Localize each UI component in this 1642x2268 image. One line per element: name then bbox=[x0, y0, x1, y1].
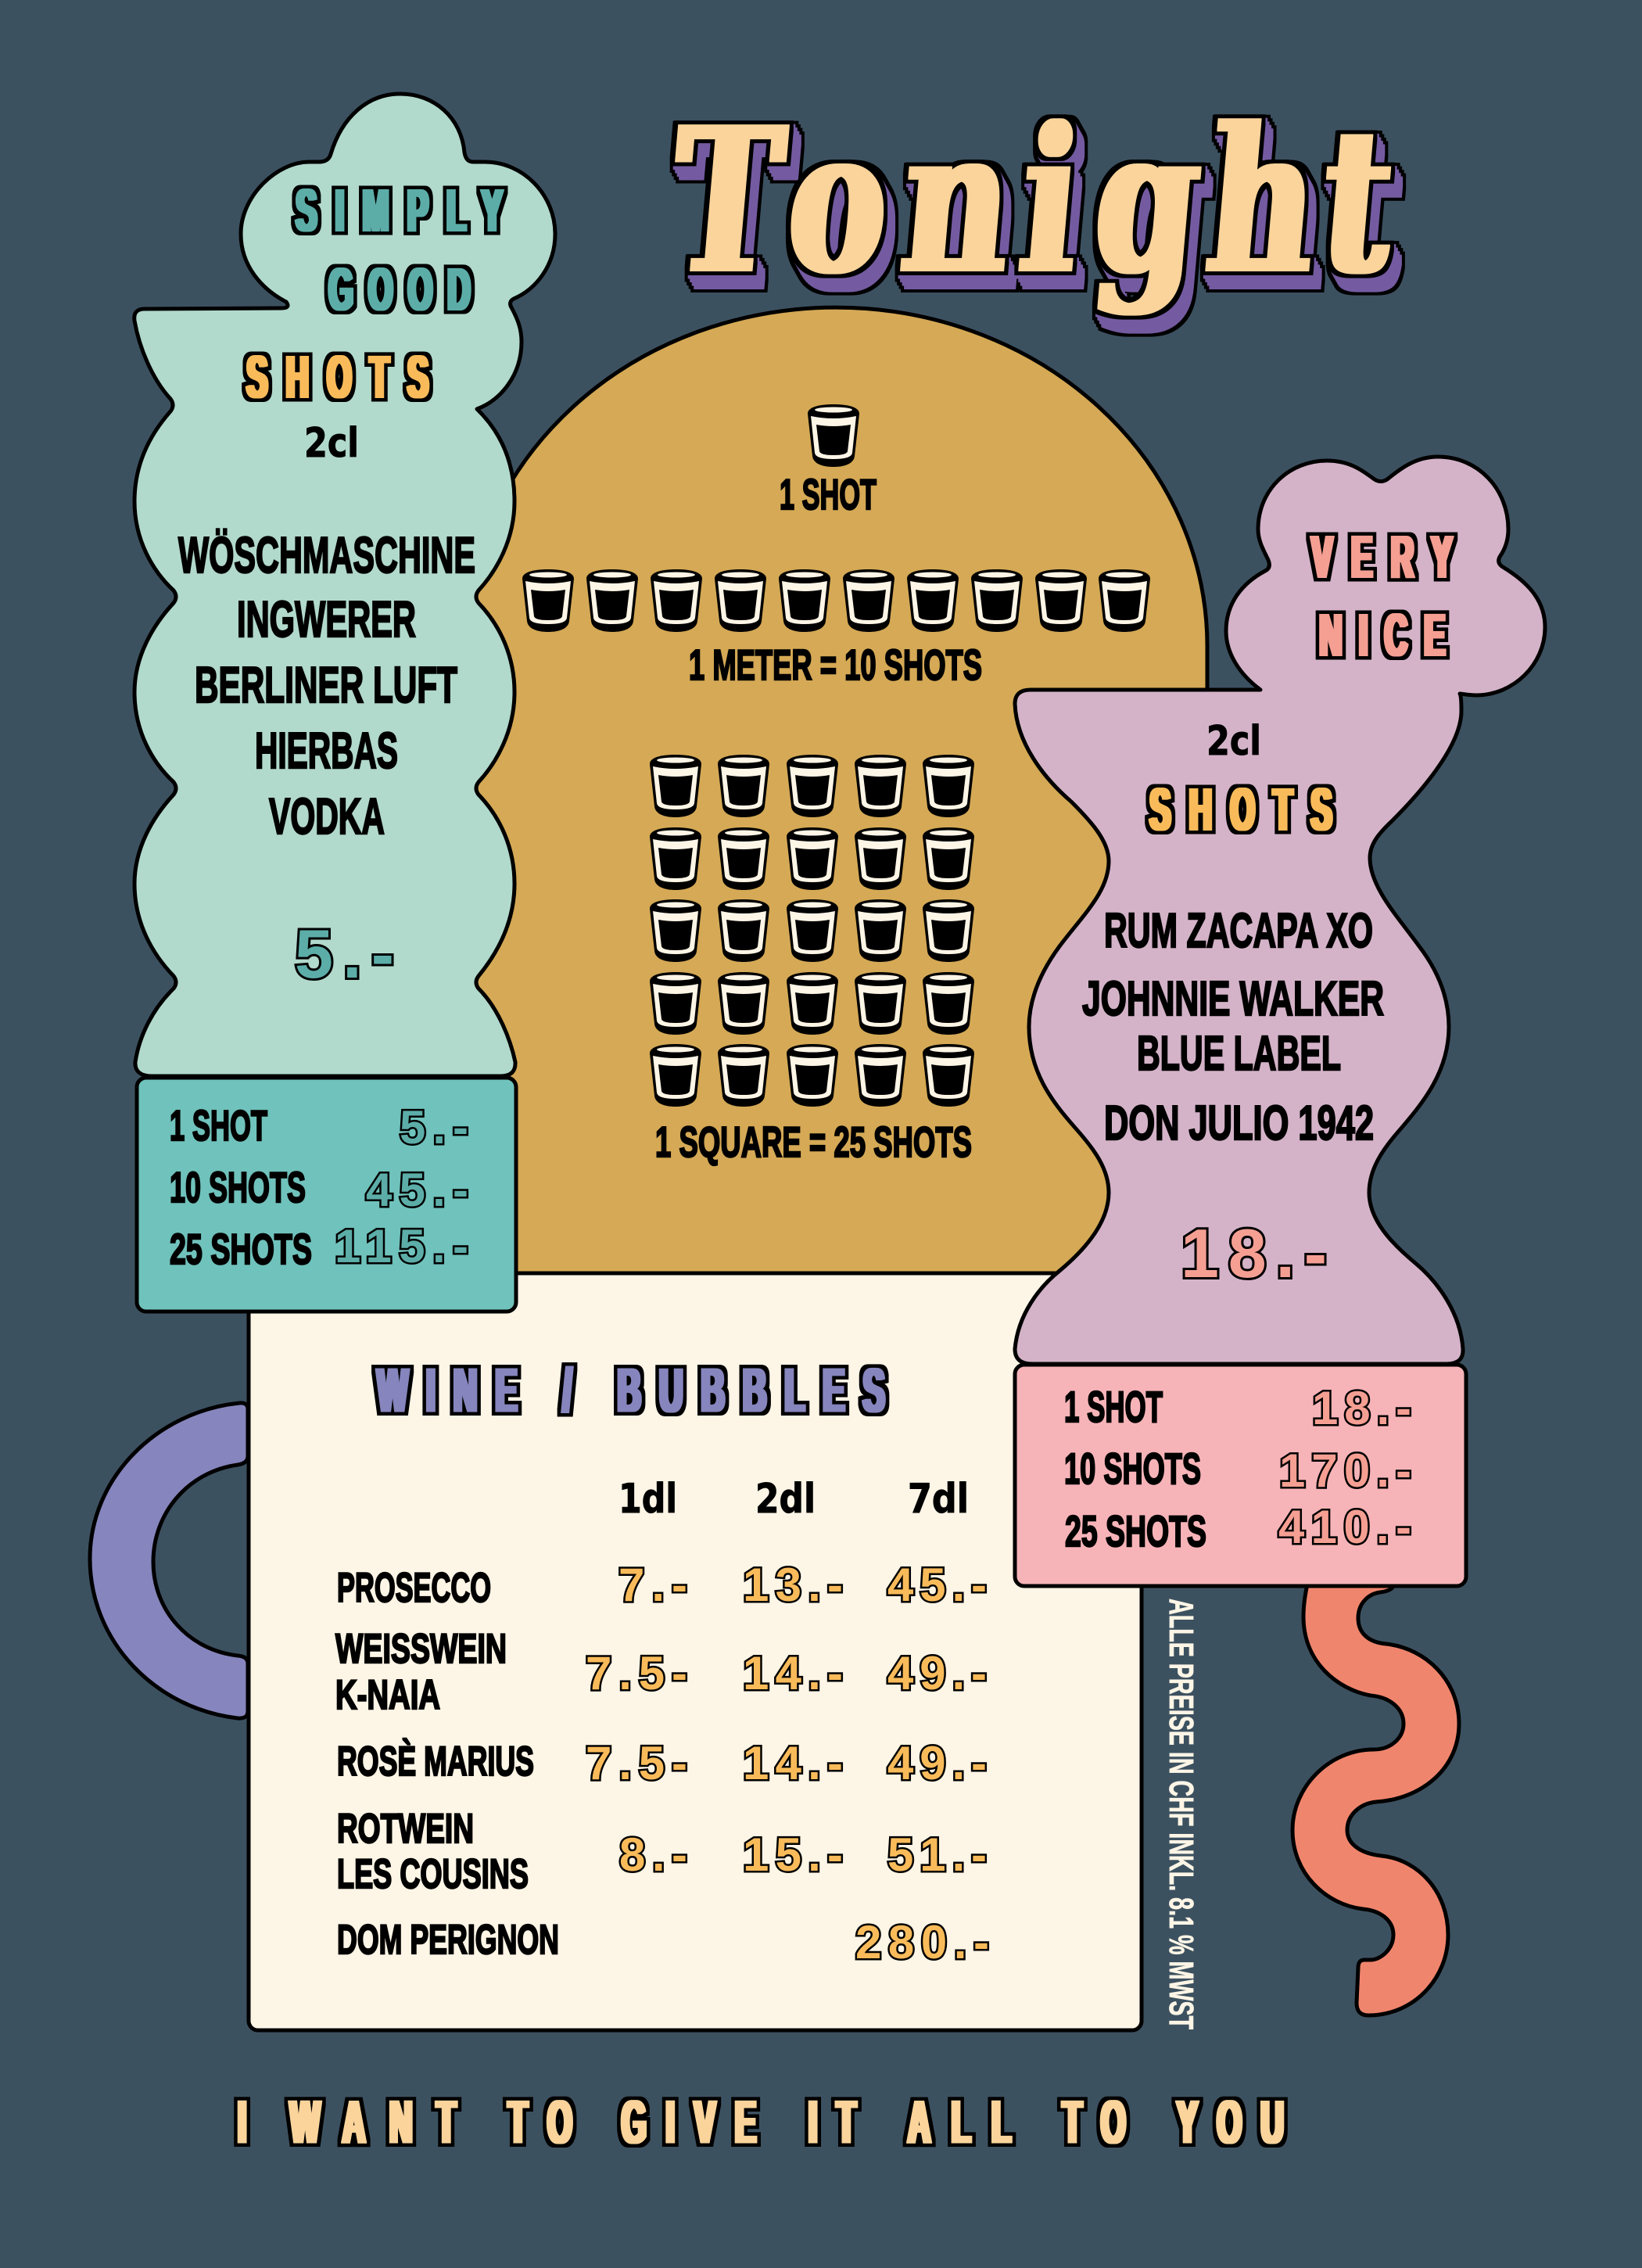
vertical note: prices include vat: ALLE PREISE IN CHF INKL. 8.1 % MWST bbox=[1162, 1599, 1200, 2029]
footer slogan: IT bbox=[808, 2089, 856, 2157]
list of spirits bbox=[178, 526, 475, 845]
icon: row of ten shot glasses bbox=[522, 569, 1150, 632]
row: rotwein les cousins: 8.- bbox=[619, 1828, 687, 1881]
row: dom perignon: 280.- bbox=[855, 1916, 989, 1968]
footer slogan: GIVE bbox=[622, 2089, 756, 2157]
column headers bbox=[618, 1476, 969, 1523]
row: prosecco: PROSECCO bbox=[337, 1565, 491, 1611]
row: weisswein k-naia: 49.- bbox=[887, 1647, 987, 1699]
list of spirits: DON JULIO 1942 bbox=[1104, 1096, 1374, 1150]
footer slogan bbox=[238, 2089, 1284, 2157]
teal price box: 25 SHOTS bbox=[170, 1225, 312, 1273]
list of spirits: RUM ZACAPA XO bbox=[1104, 904, 1373, 958]
row: dom perignon: DOM PERIGNON bbox=[337, 1917, 559, 1963]
pink price box: 10 SHOTS bbox=[1064, 1444, 1201, 1493]
teal price box: 5.- bbox=[400, 1101, 468, 1154]
pink price box: 170.- bbox=[1279, 1444, 1411, 1497]
row: rotwein les cousins: 15.- bbox=[743, 1828, 843, 1881]
row: rotwein les cousins: LES COUSINS bbox=[337, 1851, 529, 1897]
size: 2cl: 2cl bbox=[1206, 718, 1261, 765]
row: weisswein k-naia bbox=[335, 1626, 987, 1718]
row: prosecco: 45.- bbox=[887, 1559, 987, 1611]
teal price box: 10 SHOTS bbox=[170, 1163, 306, 1211]
row: rotwein les cousins: 51.- bbox=[887, 1828, 987, 1881]
list of spirits: BLUE LABEL bbox=[1137, 1027, 1341, 1081]
icon: square of 25 shot glasses bbox=[650, 755, 974, 1107]
teal price box: 1 SHOT bbox=[170, 1101, 267, 1150]
footer slogan: YOU bbox=[1177, 2089, 1284, 2157]
row: dom perignon bbox=[337, 1916, 989, 1968]
panel: wine and bubbles bbox=[249, 1273, 1142, 2030]
decorative coral squiggle bbox=[1292, 1580, 1459, 2015]
panel: very nice shots bbox=[1015, 457, 1545, 1586]
mint blob bbox=[134, 94, 555, 1076]
row: prosecco: 13.- bbox=[743, 1559, 843, 1611]
row: rose marius bbox=[337, 1737, 987, 1789]
gold arch bbox=[464, 307, 1207, 1275]
heading: very: VERY bbox=[1312, 523, 1452, 591]
row: weisswein k-naia: K-NAIA bbox=[335, 1672, 440, 1718]
list of spirits bbox=[1082, 904, 1384, 1150]
list of spirits: INGWERER bbox=[237, 590, 416, 648]
heading: wine / bubbles: WINE / BUBBLES bbox=[377, 1355, 884, 1426]
price: 5.-: 5.- bbox=[295, 915, 394, 992]
pink price box bbox=[1015, 1365, 1466, 1586]
cream card bbox=[249, 1273, 1142, 2030]
row: weisswein k-naia: 14.- bbox=[743, 1647, 843, 1699]
decorative lavender arc bbox=[90, 1403, 248, 1718]
list of spirits: BERLINER LUFT bbox=[195, 656, 457, 713]
row: weisswein k-naia: 7.5- bbox=[586, 1647, 687, 1699]
row: rotwein les cousins: ROTWEIN bbox=[337, 1806, 474, 1852]
teal price box: 115.- bbox=[335, 1220, 468, 1272]
pink blob bbox=[1015, 457, 1545, 1364]
column headers: 2dl bbox=[755, 1476, 816, 1523]
label: 1 meter: 1 METER = 10 SHOTS bbox=[689, 641, 982, 689]
pink price box: 25 SHOTS bbox=[1065, 1506, 1206, 1556]
list of spirits: HIERBAS bbox=[255, 722, 398, 779]
heading: nice: NICE bbox=[1320, 601, 1445, 669]
label: 1 square: 1 SQUARE = 25 SHOTS bbox=[655, 1118, 972, 1166]
panel: simply good shots bbox=[134, 94, 555, 1312]
column headers: 7dl bbox=[908, 1476, 969, 1523]
price: 18.-: 18.- bbox=[1181, 1215, 1327, 1292]
row: weisswein k-naia: WEISSWEIN bbox=[335, 1626, 507, 1672]
footer slogan: TO bbox=[508, 2089, 572, 2157]
teal price box bbox=[137, 1078, 516, 1312]
list of spirits: VODKA bbox=[269, 788, 385, 845]
heading: shots: SHOTS bbox=[1149, 776, 1332, 844]
panel: gold shot measures bbox=[464, 307, 1207, 1275]
heading: simply: SIMPLY bbox=[296, 177, 503, 245]
footer slogan: TO bbox=[1063, 2089, 1126, 2157]
title: Tonight bbox=[664, 84, 1401, 318]
label: 1 shot: 1 SHOT bbox=[780, 470, 877, 519]
list of spirits: JOHNNIE WALKER bbox=[1082, 972, 1384, 1026]
heading: good: GOOD bbox=[328, 256, 470, 324]
pink price box: 18.- bbox=[1312, 1382, 1411, 1434]
footer slogan: WANT bbox=[290, 2089, 456, 2157]
row: rose marius: ROSÈ MARIUS bbox=[337, 1738, 534, 1785]
teal price box: 45.- bbox=[366, 1164, 468, 1216]
row: rose marius: 14.- bbox=[743, 1737, 843, 1789]
footer slogan: ALL bbox=[908, 2089, 1011, 2157]
pink price box: 410.- bbox=[1278, 1501, 1411, 1553]
size: 2cl: 2cl bbox=[304, 420, 359, 467]
list of spirits: WÖSCHMASCHINE bbox=[178, 526, 475, 583]
row: rose marius: 7.5- bbox=[586, 1737, 687, 1789]
pink price box: 1 SHOT bbox=[1064, 1382, 1163, 1431]
row: rotwein les cousins bbox=[337, 1806, 987, 1897]
row: prosecco: 7.- bbox=[618, 1559, 687, 1611]
footer slogan: I bbox=[238, 2089, 246, 2157]
row: rose marius: 49.- bbox=[887, 1737, 987, 1789]
heading: shots: SHOTS bbox=[247, 343, 428, 411]
icon: single shot glass bbox=[808, 404, 859, 467]
column headers: 1dl bbox=[618, 1476, 677, 1523]
row: prosecco bbox=[337, 1559, 987, 1611]
